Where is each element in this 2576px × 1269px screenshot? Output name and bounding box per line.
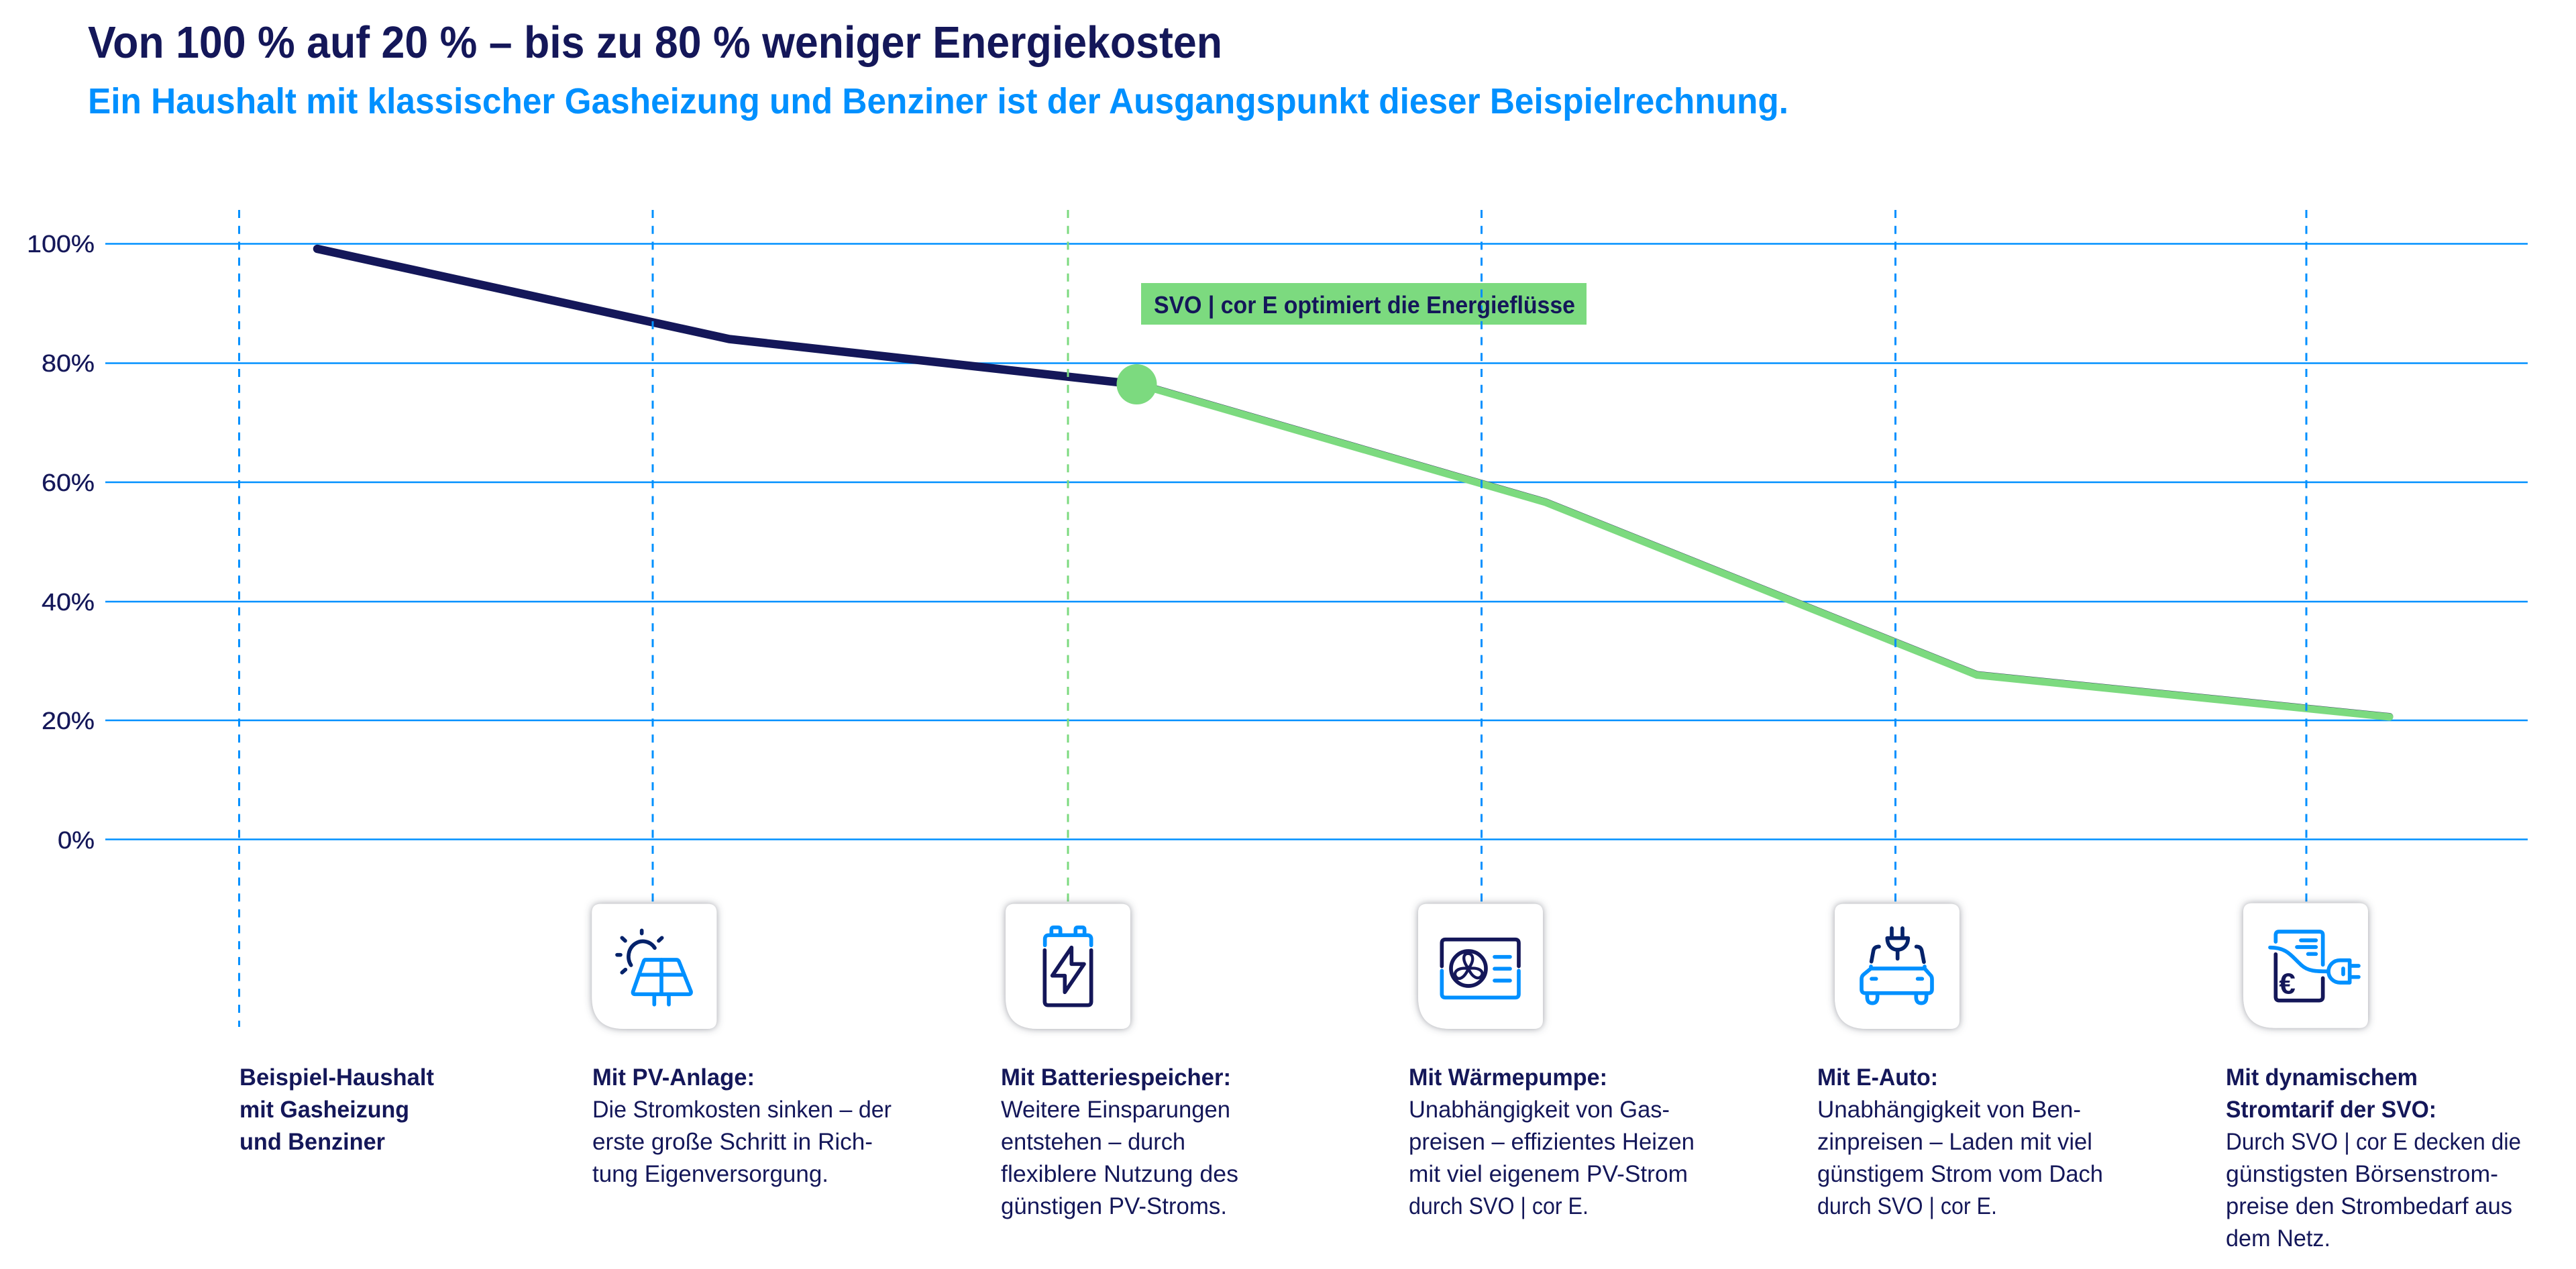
caption: battery storage: günstigen PV-Stroms. (1001, 1193, 1227, 1219)
icon card: battery (1006, 904, 1130, 1029)
callout text: SVO | cor E optimiert die Energieflüsse (1154, 291, 1575, 319)
caption: battery storage: flexiblere Nutzung des (1001, 1161, 1238, 1187)
caption: example household: und Benziner (239, 1129, 385, 1155)
caption: heat pump: preisen – effizientes Heizen (1409, 1129, 1695, 1155)
y-axis labels: 60% (42, 469, 95, 496)
icon card: heat pump (1418, 904, 1543, 1029)
icon card: solar panel (592, 904, 716, 1029)
caption: PV system (592, 1064, 892, 1187)
caption: electric car: günstigem Strom vom Dach (1817, 1161, 2103, 1187)
caption: PV system: Mit PV-Anlage: (592, 1064, 755, 1091)
y-axis labels (27, 230, 95, 854)
caption: electric car (1817, 1064, 2103, 1219)
caption: dynamic tariff: günstigsten Börsenstrom- (2226, 1161, 2498, 1187)
subtitle: Ein Haushalt mit klassischer Gasheizung und Benziner ist der Ausgangspunkt dieser Beispielrechnung. (88, 81, 1788, 121)
caption: heat pump: mit viel eigenem PV-Strom (1409, 1161, 1688, 1187)
icon card: electric car (1835, 904, 1960, 1029)
caption: battery storage: Weitere Einsparungen (1001, 1097, 1230, 1123)
caption: PV system: tung Eigenversorgung. (592, 1161, 828, 1187)
caption: dynamic tariff: Durch SVO | cor E decken die (2226, 1129, 2521, 1155)
icon card: dynamic tariff (2243, 903, 2368, 1028)
caption: example household: mit Gasheizung (239, 1097, 409, 1123)
caption: dynamic tariff: preise den Strombedarf aus (2226, 1193, 2512, 1219)
y-axis labels: 100% (27, 230, 95, 258)
caption: heat pump: durch SVO | cor E. (1409, 1193, 1589, 1219)
caption: electric car: zinpreisen – Laden mit viel (1817, 1129, 2092, 1155)
caption: electric car: Unabhängigkeit von Ben- (1817, 1097, 2081, 1123)
y-axis labels: 20% (42, 707, 95, 734)
caption: dynamic tariff (2226, 1064, 2521, 1252)
caption: PV system: Die Stromkosten sinken – der (592, 1097, 892, 1123)
chart gridlines (105, 244, 2528, 840)
line chart: cost curve (317, 249, 2390, 717)
y-axis labels: 0% (58, 826, 95, 854)
caption: dynamic tariff: Mit dynamischem (2226, 1064, 2418, 1091)
y-axis labels: 80% (42, 349, 95, 377)
callout box (1141, 283, 1587, 325)
caption: heat pump: Unabhängigkeit von Gas- (1409, 1097, 1670, 1123)
vertical dashed guides (239, 210, 2306, 1027)
caption: heat pump (1409, 1064, 1695, 1219)
icon card: dynamic tariff: € (2279, 968, 2296, 1001)
caption: battery storage: entstehen – durch (1001, 1129, 1185, 1155)
caption: electric car: Mit E-Auto: (1817, 1064, 1938, 1091)
caption: dynamic tariff: Stromtarif der SVO: (2226, 1097, 2436, 1123)
y-axis labels: 40% (42, 588, 95, 616)
caption: dynamic tariff: dem Netz. (2226, 1225, 2330, 1252)
caption: battery storage: Mit Batteriespeicher: (1001, 1064, 1231, 1091)
caption: example household (239, 1064, 434, 1155)
caption: battery storage (1001, 1064, 1238, 1219)
caption: heat pump: Mit Wärmepumpe: (1409, 1064, 1607, 1091)
caption: electric car: durch SVO | cor E. (1817, 1193, 1997, 1219)
caption: example household: Beispiel-Haushalt (239, 1064, 434, 1091)
caption: PV system: erste große Schritt in Rich- (592, 1129, 873, 1155)
title: Von 100 % auf 20 % – bis zu 80 % weniger Energiekosten (88, 17, 1222, 68)
